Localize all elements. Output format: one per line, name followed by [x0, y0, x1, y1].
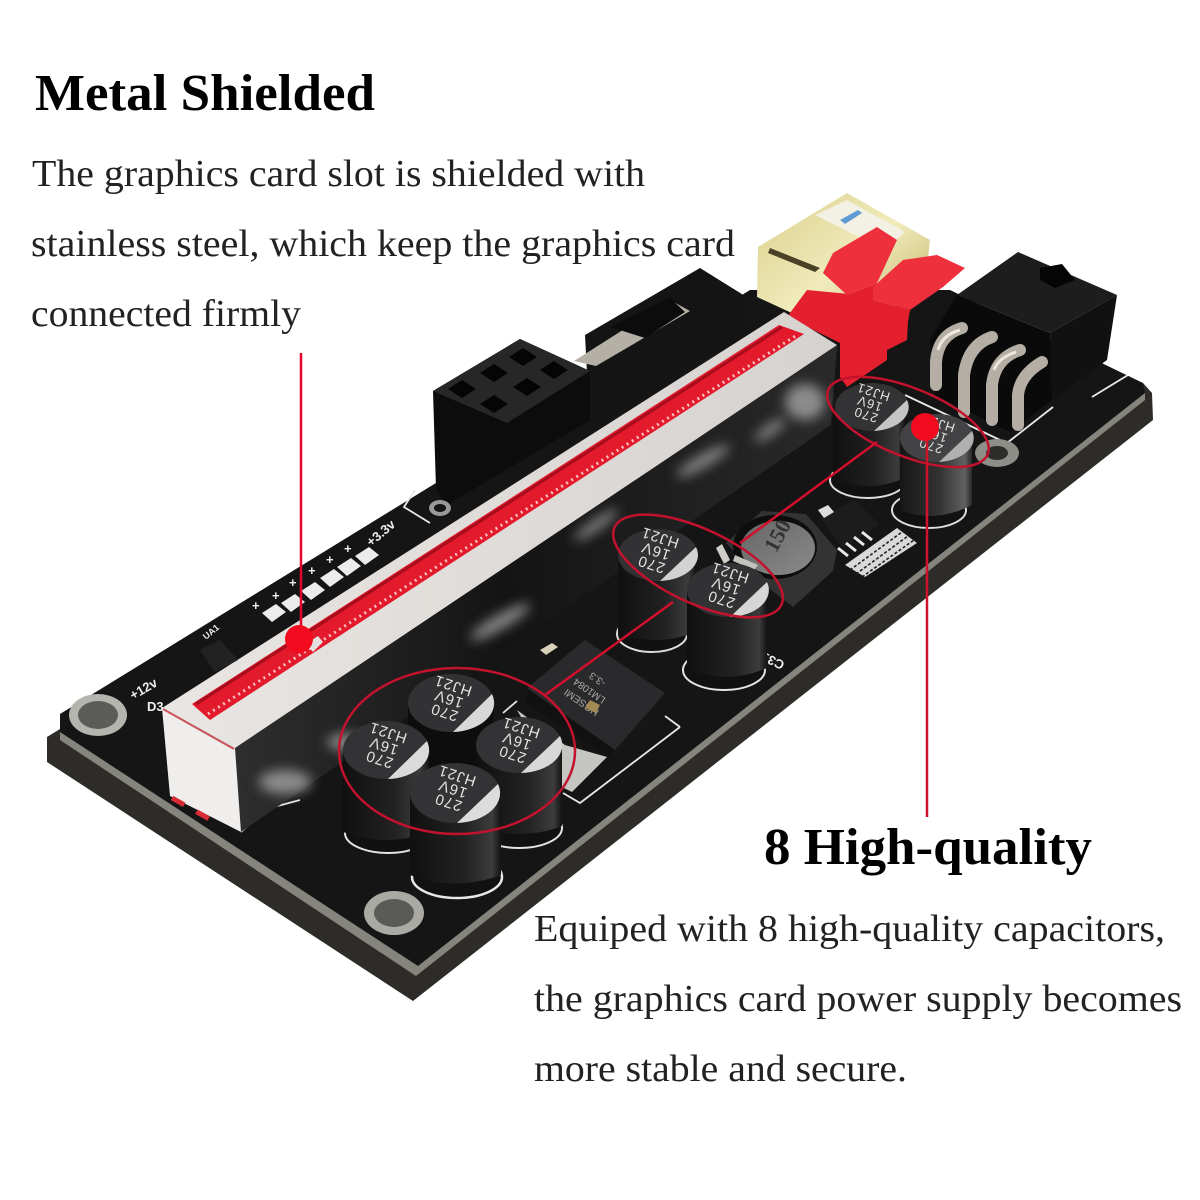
- silk outlines on board: [241, 375, 1128, 832]
- capacitor front: 16V: [436, 776, 470, 801]
- board top: [60, 290, 1145, 968]
- capacitor A: 16V: [855, 392, 884, 415]
- capacitor 2: 270: [705, 587, 737, 611]
- text block: metal shielded description: [31, 153, 735, 335]
- board silk labels: +12v: [127, 675, 161, 703]
- capacitor left: 270: [363, 747, 395, 771]
- capacitor group bottom left: [343, 671, 562, 898]
- capacitor top: [408, 671, 494, 770]
- callout: capacitor pointer: [911, 413, 939, 817]
- SMD LEDs: +: [252, 598, 260, 613]
- riser board illustration: [47, 193, 1153, 1001]
- capacitor 1: 16V: [639, 538, 673, 563]
- silver heat tab: [517, 710, 607, 792]
- capacitor top: 270: [428, 700, 460, 724]
- text block: metal shielded description: The graphics card slot is shielded with: [32, 153, 645, 195]
- text block: capacitors description: [534, 908, 1182, 1090]
- board silk labels: C31: [759, 649, 787, 673]
- capacitor right: [476, 713, 562, 848]
- capacitor 2: [683, 558, 769, 690]
- steel top face: [162, 312, 837, 748]
- capacitor left: 16V: [367, 733, 401, 758]
- SMD LEDs: +: [289, 575, 297, 590]
- SMD LEDs: +: [326, 552, 334, 567]
- SMD LEDs: [252, 541, 379, 622]
- capacitor 2: HJ21: [709, 558, 751, 586]
- capacitor front: HJ21: [436, 761, 478, 789]
- capacitor D: HJ21: [920, 411, 957, 436]
- capacitor top: HJ21: [432, 671, 474, 699]
- text block: capacitors description: more stable and secure.: [534, 1048, 907, 1090]
- board silk labels: +3.3v: [363, 516, 399, 549]
- capacitor D: 16V: [920, 423, 949, 446]
- SMD LEDs: +: [272, 588, 280, 603]
- inductor 150: [716, 511, 837, 607]
- board silk labels: UA1: [201, 622, 221, 642]
- stainless steel PCIe slot: [162, 312, 837, 832]
- 6-pin power connector rear: [574, 268, 745, 430]
- capacitor pair top right: [830, 380, 974, 528]
- capacitor D: 270: [917, 435, 945, 457]
- foam base: [47, 383, 1153, 1001]
- SMD LEDs: +: [344, 541, 352, 556]
- capacitor A: HJ21: [855, 380, 892, 405]
- text block: metal shielded description: connected firmly: [31, 293, 301, 335]
- red latch clips: [787, 227, 965, 387]
- steel front face: [162, 708, 241, 832]
- capacitor right: 16V: [500, 728, 534, 753]
- small chips right: [818, 500, 917, 577]
- red contact slot: [192, 325, 804, 720]
- capacitor 2: 16V: [709, 573, 743, 598]
- capacitor right: 270: [496, 742, 528, 766]
- capacitor front: [410, 761, 502, 898]
- text block: capacitors description: Equiped with 8 high-quality capacitors,: [534, 908, 1165, 950]
- voltage chip: -3.3: [587, 669, 608, 688]
- capacitor A: [830, 380, 909, 498]
- capacitor 1: 270: [635, 552, 667, 576]
- capacitor 1: [617, 523, 698, 652]
- capacitor pair middle: [617, 523, 769, 690]
- USB gold connector: [757, 193, 930, 340]
- heading: 8 High-quality: 8 High-quality: [764, 819, 1092, 876]
- SMD LEDs: +: [308, 563, 316, 578]
- capacitor 1: HJ21: [639, 523, 681, 551]
- text block: metal shielded description: stainless steel, which keep the graphics card: [31, 223, 735, 265]
- capacitor left: HJ21: [367, 718, 409, 746]
- title: Metal Shielded: Metal Shielded: [35, 65, 375, 122]
- voltage chip: [517, 640, 665, 792]
- board edge strip: [60, 393, 1145, 976]
- inductor 150: 150: [758, 515, 796, 556]
- capacitor front: 270: [432, 790, 464, 814]
- capacitor top: 16V: [432, 686, 466, 711]
- capacitor D: [892, 411, 974, 528]
- board silk labels: [127, 516, 787, 714]
- capacitor left: [343, 718, 431, 853]
- callout: capacitor highlight rings: [339, 358, 1000, 834]
- capacitor A: 270: [852, 404, 880, 426]
- text block: capacitors description: the graphics card power supply becomes: [534, 978, 1182, 1020]
- callout: metal shield pointer: [285, 353, 313, 653]
- voltage chip: HGSEMI: [562, 686, 601, 718]
- capacitor right: HJ21: [500, 713, 542, 741]
- board silk labels: D3: [147, 699, 164, 714]
- 6-pin power connector right: [930, 252, 1117, 432]
- mirror side of shield: [235, 345, 837, 832]
- mounting holes: [69, 439, 1019, 935]
- UA1 chip: [200, 640, 238, 672]
- voltage chip: LM1084: [572, 675, 608, 705]
- 6-pin power connector front: [433, 339, 590, 505]
